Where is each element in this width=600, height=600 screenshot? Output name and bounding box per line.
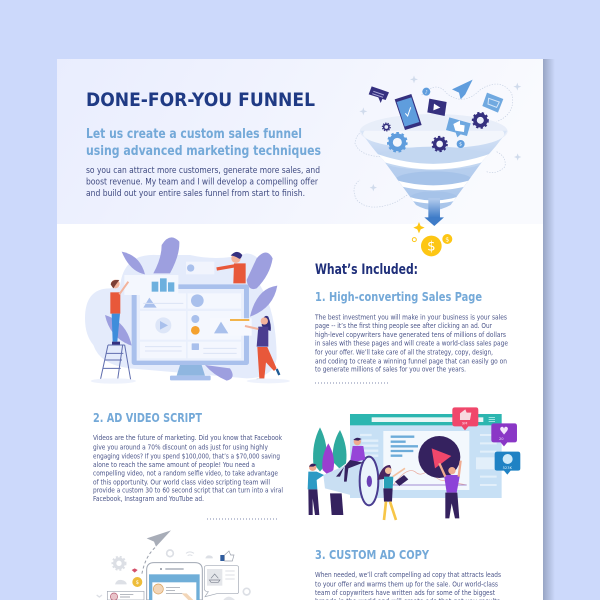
section 1 text: and coding to create a winning funnel page that can easily go on: [315, 356, 507, 365]
icon: chat bubble: [369, 86, 389, 103]
section 1 text: page -- it’s the first thing people see after clicking an ad. Our: [315, 321, 492, 330]
phone: [147, 563, 202, 600]
section 1 text: in sales with these pages and will create a world-class sales page: [315, 339, 508, 348]
section 2 heading: 2. AD VIDEO SCRIPT: [93, 411, 203, 425]
coin: [132, 577, 142, 587]
heading: what's included: What’s Included:: [315, 262, 418, 278]
man reaching for play: [439, 461, 461, 518]
sparkles: [359, 75, 521, 191]
subheading: using advanced marketing techniques: [86, 144, 321, 159]
section 3 text: team of copywriters have written ads for some of the biggest: [315, 588, 495, 597]
illustration: mobile ad copy: [97, 530, 250, 600]
illustration: team building web page: [85, 237, 290, 384]
dashed flow lines: [354, 84, 513, 207]
browser window: [350, 414, 502, 498]
icon: dollar badge: $: [459, 142, 462, 148]
section 2 text: Videos are the future of marketing. Did you know that Facebook: [93, 433, 283, 442]
section 3 text: to your offer and warms them up for the sale. Our world-class: [315, 580, 498, 589]
trees: [313, 427, 347, 475]
person with card: [245, 316, 290, 383]
profile card: [186, 262, 214, 274]
social badge: hearts: ♥: [499, 425, 509, 438]
section 1 text: The best investment you will make in your business is your sales: [314, 312, 507, 322]
person on megaphone: [336, 438, 365, 482]
section 2 text: give you around a 70% discount on ads just for using highly: [93, 442, 269, 451]
person on ladder: [91, 280, 136, 384]
title: DONE-FOR-YOU FUNNEL: [86, 89, 315, 111]
section 2 text: Facebook, Instagram and YouTube ad.: [93, 494, 204, 503]
social badge: likes: [452, 407, 478, 430]
icon: video player: [427, 99, 447, 116]
monitor: [132, 284, 249, 380]
icon: phone: [395, 94, 422, 130]
funnel rim: [360, 114, 508, 149]
social badge: hearts: [491, 423, 517, 446]
megaphone: [323, 457, 378, 515]
thumbs up: [220, 551, 234, 561]
gear: [112, 557, 126, 570]
social badge: likes: 9M: [462, 421, 467, 425]
person behind monitor: [217, 252, 246, 283]
section 2 text: of this opportunity. Our world class video scripting team will: [93, 477, 270, 486]
intro text: and build out your entire sales funnel from start to finish.: [86, 189, 305, 199]
icon: gears: [382, 113, 488, 152]
paper plane: [147, 530, 171, 547]
arrow down: [424, 198, 444, 226]
section 2 text: compelling video, not a random selfie video, to take advantage: [93, 469, 278, 478]
social badge: smiles: 523K: [503, 466, 513, 470]
icon: thumbs-up card: [446, 117, 471, 137]
section 2 text: engaging videos? If you spend $100,000, that’s a $70,000 saving: [93, 451, 280, 460]
header band: [57, 59, 543, 224]
subheading: [86, 127, 321, 159]
section 1 text: high-level copywriters have generated tens of millions of dollars: [315, 330, 506, 339]
coin: $: [136, 580, 139, 586]
icon: gold coins: $: [427, 240, 436, 255]
image card: [210, 318, 252, 336]
section 1 text: to generate millions of sales for you over the years.: [315, 365, 466, 374]
page shadow: [543, 59, 555, 600]
icon: paper plane: [452, 80, 473, 99]
icon: music badge: [422, 88, 430, 96]
section 3 text: When needed, we’ll craft compelling ad copy that attracts leads: [315, 570, 501, 579]
section 2 text: alone to reach the same amount of people! You need a: [93, 460, 255, 469]
illustration: video marketing with megaphone: [308, 407, 520, 520]
social badge: hearts: 20: [499, 437, 504, 441]
funnel body: [360, 131, 507, 210]
decorative leaves: [105, 237, 277, 381]
icon: gold coins: [412, 222, 452, 256]
intro text: boost revenue. My team and I will develop a compelling offer: [86, 178, 318, 188]
section 3 text: [315, 570, 501, 600]
icon: shopping basket: [482, 93, 503, 113]
section 3 heading: 3. CUSTOM AD COPY: [315, 548, 429, 562]
funnel illustration: [354, 75, 521, 256]
person holding megaphone: [308, 464, 324, 515]
play button: [418, 436, 460, 478]
icon: gold coins: $: [445, 236, 449, 243]
section 1 heading: 1. High-converting Sales Page: [315, 290, 482, 304]
social badge: smiles: [495, 452, 520, 475]
intro text: [86, 166, 320, 199]
profile card: [107, 591, 144, 600]
section 1 text: for your offer. We’ll take care of all the strategy, copy, design,: [315, 347, 493, 356]
woman with tablet: [377, 465, 408, 520]
section 2 text: provide a custom 30 to 60 second script that can turn into a viral: [93, 486, 283, 495]
chart card: [124, 275, 178, 295]
page card: [57, 59, 543, 600]
small icons: [97, 550, 250, 600]
icon: dollar badge: [457, 140, 465, 148]
intro text: so you can attract more customers, generate more sales, and: [86, 166, 320, 176]
subheading: Let us create a custom sales funnel: [86, 127, 302, 142]
background blob: [85, 253, 277, 378]
section 2 text: [93, 433, 283, 503]
icon: music badge: ♪: [425, 89, 428, 95]
speech card: [204, 566, 239, 597]
section 1 text: [314, 312, 508, 374]
